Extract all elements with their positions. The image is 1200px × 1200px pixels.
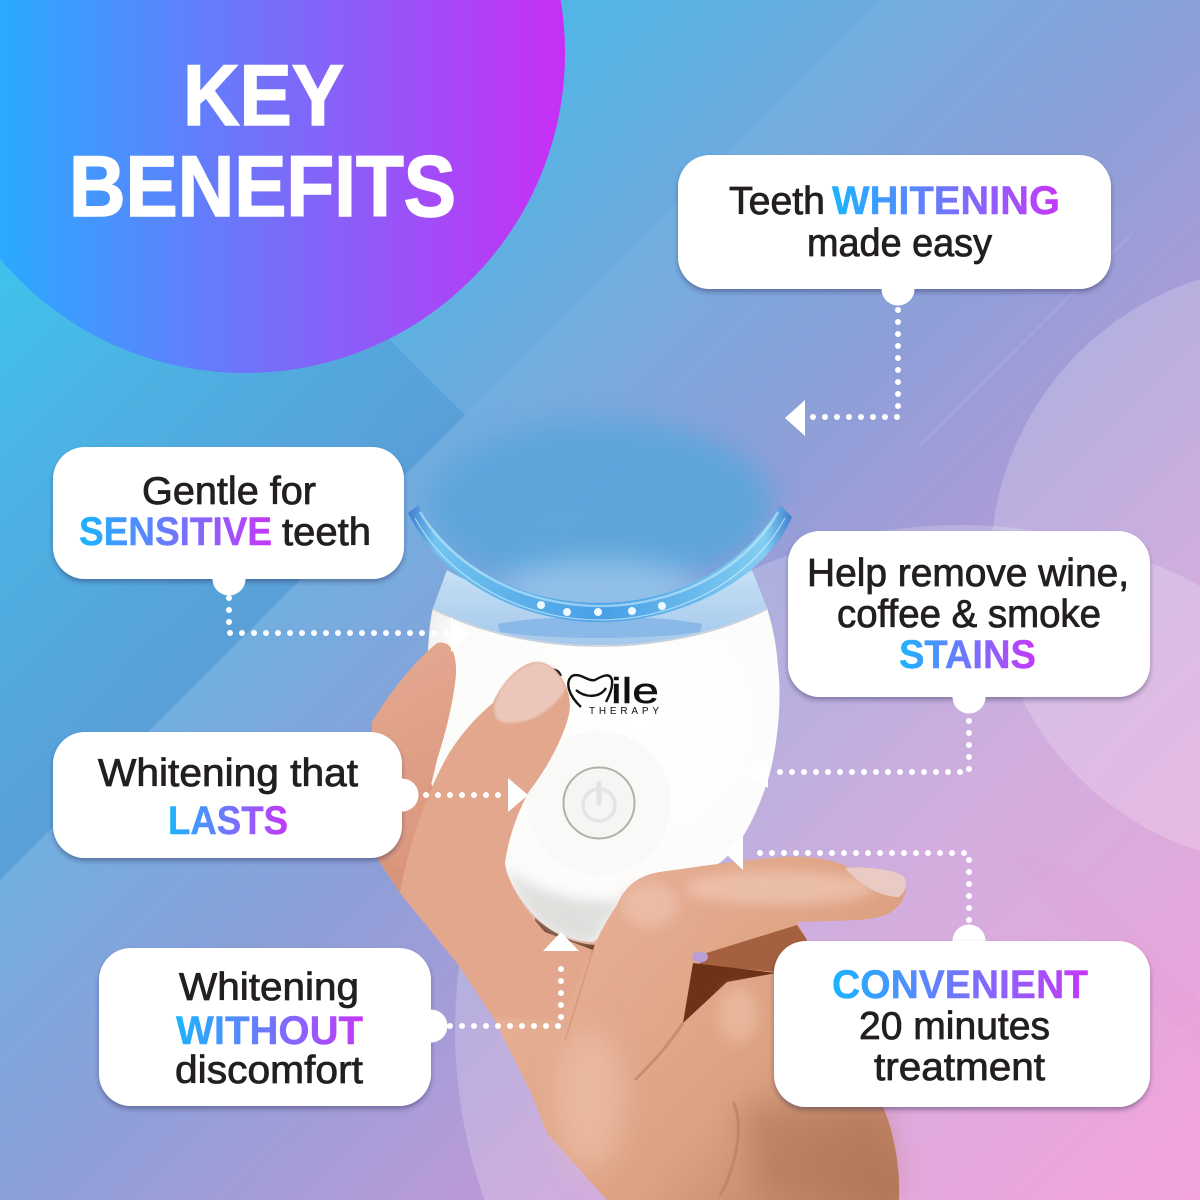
hand: palm behind device (372, 722, 899, 1200)
brand logo: ile (611, 670, 659, 711)
left finger (372, 643, 456, 870)
callout: without discomfort: Whitening (179, 966, 359, 1009)
brand logo: S (532, 658, 565, 714)
index crease (635, 1023, 683, 1080)
callout: without discomfort: WITHOUT (176, 1009, 363, 1053)
arrow: sensitive connector (229, 598, 470, 652)
callout: convenient: CONVENIENT (832, 963, 1088, 1007)
device bottom shading (505, 867, 625, 942)
callout: teeth whitening: made easy (807, 222, 992, 265)
tray lower sheen (415, 518, 785, 620)
thumb nail (494, 662, 565, 723)
middle finger shadow (700, 925, 807, 972)
brand logo (532, 658, 659, 717)
arrow: without connector (450, 932, 579, 1026)
palm shadow (740, 1105, 895, 1195)
callout: teeth whitening: Teeth (729, 180, 825, 223)
palm crease (720, 1102, 738, 1195)
title: BENEFITS (69, 139, 456, 235)
callout: lasting whitening (53, 732, 418, 858)
callout: without discomfort (99, 948, 448, 1106)
title circle (0, 0, 565, 373)
tray upper sheen (420, 512, 778, 606)
callout: sensitive teeth (53, 447, 404, 596)
arrow: whitening connector (785, 310, 898, 436)
callout: sensitive teeth: teeth (282, 511, 371, 554)
device (408, 505, 792, 942)
callout: stains: Help remove wine, (807, 552, 1129, 595)
callout: stains (788, 531, 1150, 714)
palm highlight (555, 1030, 625, 1170)
knuckle highlight (622, 883, 678, 927)
title (69, 48, 456, 235)
index nail (845, 867, 906, 897)
callout: stains: coffee & smoke (837, 593, 1101, 636)
decorative circle bottom (455, 525, 1200, 1200)
device body (427, 608, 780, 942)
callout: convenient (774, 924, 1150, 1107)
callout: stains: STAINS (899, 633, 1036, 677)
decorative circle right (991, 279, 1200, 851)
button halo (527, 731, 671, 875)
callout: sensitive teeth: Gentle for (142, 470, 316, 513)
title: KEY (183, 48, 344, 144)
LED lights (537, 601, 666, 616)
callout: lasting whitening: Whitening that (98, 752, 358, 795)
arrow: convenient connector (725, 835, 969, 920)
brand logo: THERAPY (589, 706, 659, 717)
arrow: stains connector (748, 721, 969, 788)
hand: fingers in front of device (372, 643, 906, 1200)
fingertip highlight (685, 871, 875, 905)
callout: convenient: 20 minutes (859, 1005, 1050, 1048)
callout: lasting whitening: LASTS (168, 799, 288, 843)
callout: convenient: treatment (874, 1046, 1045, 1089)
index finger and palm (493, 857, 906, 1200)
collar shadow line (433, 609, 767, 646)
callout: teeth whitening (678, 155, 1111, 306)
dark gap between fingers (683, 963, 776, 1023)
ring finger highlight (718, 987, 758, 1043)
finger gap background (692, 952, 708, 962)
callout: without discomfort: discomfort (175, 1049, 363, 1092)
callout: teeth whitening: WHITENING (832, 179, 1060, 223)
device collar (433, 570, 767, 645)
tray (408, 505, 792, 622)
thumb index crease (565, 950, 593, 1040)
thumb (400, 662, 593, 1020)
blue light glow (428, 420, 772, 620)
collar inner blue (498, 618, 702, 638)
arrow: lasts connector (426, 778, 528, 812)
power button (564, 768, 634, 838)
callout: sensitive teeth: SENSITIVE (79, 510, 272, 554)
